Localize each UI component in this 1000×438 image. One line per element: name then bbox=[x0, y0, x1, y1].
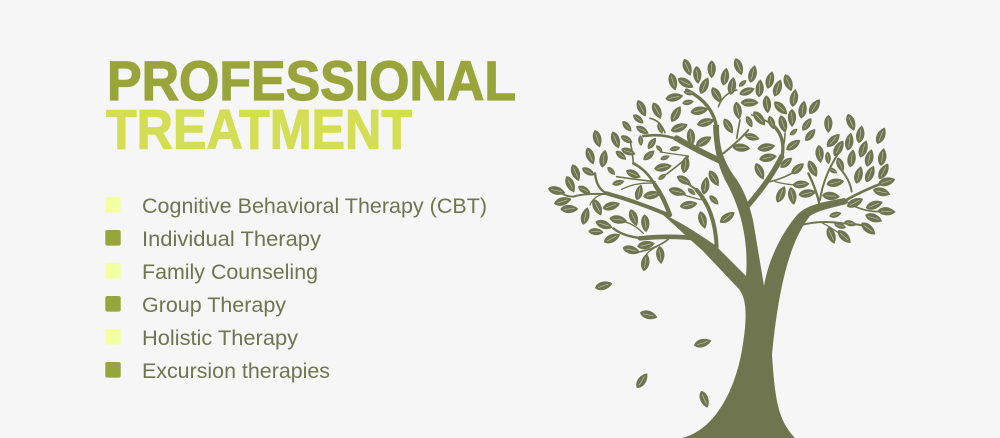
treatment list bbox=[105, 195, 487, 383]
tree illustration bbox=[547, 57, 896, 438]
heading: treatment: TREATMENT bbox=[106, 98, 412, 160]
heading: professional: PROFESSIONAL bbox=[107, 49, 516, 112]
falling leaves bbox=[594, 279, 712, 409]
right branches and leaves bbox=[718, 57, 896, 246]
list item: excursion therapies: Excursion therapies bbox=[142, 360, 330, 383]
trunk bbox=[662, 125, 847, 438]
list item: individual therapy: Individual Therapy bbox=[142, 228, 322, 251]
title bbox=[106, 49, 516, 160]
list item: holistic therapy: Holistic Therapy bbox=[142, 327, 299, 350]
left branches and leaves bbox=[547, 57, 725, 272]
list item: CBT: Cognitive Behavioral Therapy (CBT) bbox=[142, 195, 487, 218]
list item: family counseling: Family Counseling bbox=[142, 261, 318, 284]
list item: group therapy: Group Therapy bbox=[142, 294, 287, 317]
